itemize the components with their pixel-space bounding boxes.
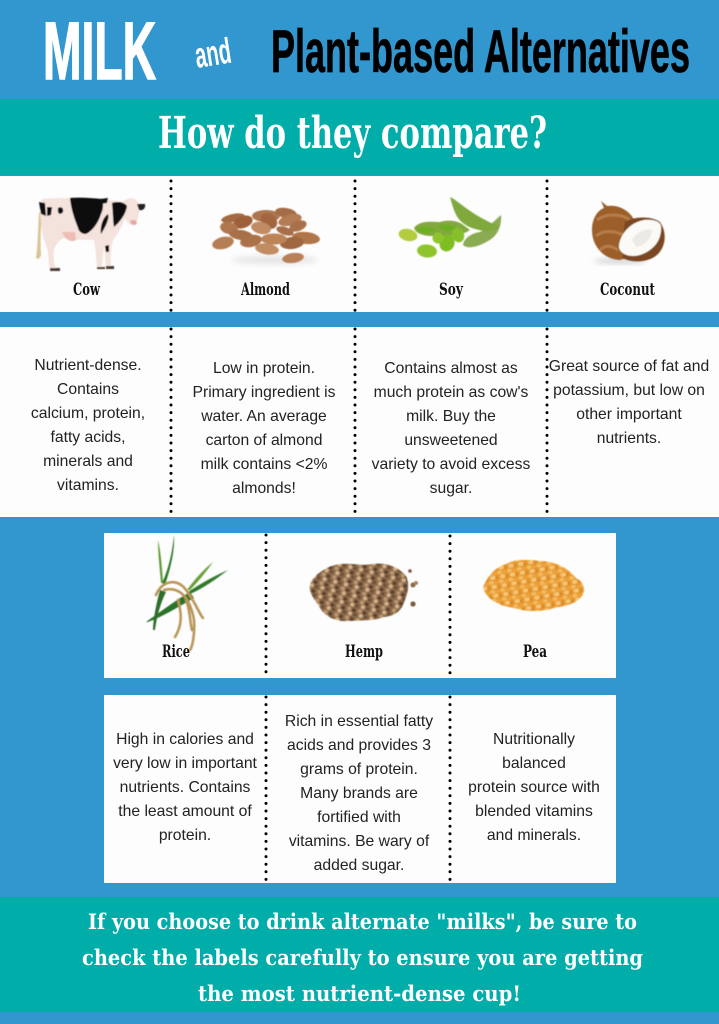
- footer message: If you choose to drink alternate "milks", be sure to: [88, 909, 637, 934]
- text: hemp description: Many brands are: [300, 785, 418, 802]
- text: soy description: much protein as cow's: [374, 384, 529, 401]
- label: Soy: Soy: [439, 280, 464, 300]
- text: cow description: minerals and: [43, 453, 133, 470]
- panel: second row images: [104, 533, 616, 678]
- text: soy description: Contains almost as: [384, 360, 518, 377]
- title: MILK: MILK: [43, 6, 156, 97]
- icon: split peas: [483, 560, 584, 611]
- text: almond description: milk contains <2%: [201, 456, 327, 473]
- text: rice description: protein.: [159, 827, 211, 844]
- text: cow description: Contains: [57, 381, 119, 398]
- text: coconut description: other important: [576, 406, 682, 423]
- footer message: [82, 909, 643, 1006]
- text: almond description: carton of almond: [206, 432, 322, 449]
- icon: hemp seeds: [310, 564, 418, 621]
- text: coconut description: potassium, but low on: [553, 382, 705, 399]
- text: hemp description: fortified with: [317, 809, 401, 826]
- text: cow description: calcium, protein,: [31, 405, 145, 422]
- text: pea description: Nutritionally: [493, 731, 575, 748]
- icon: cow: [36, 198, 145, 271]
- label: Almond: Almond: [240, 280, 290, 300]
- text: cow description: vitamins.: [57, 477, 119, 494]
- text: pea description: blended vitamins: [475, 803, 593, 820]
- text: coconut description: Great source of fat and: [549, 358, 709, 375]
- text: coconut description: nutrients.: [597, 430, 661, 447]
- text: almond description: almonds!: [232, 480, 296, 497]
- text: almond description: Low in protein.: [213, 360, 315, 377]
- text: almond description: water. An average: [200, 408, 327, 425]
- text: pea description: protein source with: [468, 779, 600, 796]
- panel: second row descriptions: [104, 695, 616, 883]
- icon: soy beans: [397, 197, 501, 259]
- footer band: [0, 897, 719, 1012]
- label: Coconut: Coconut: [600, 280, 655, 300]
- panel: first row descriptions: [0, 327, 719, 517]
- text: rice description: very low in important: [113, 755, 258, 772]
- footer message: the most nutrient-dense cup!: [198, 981, 521, 1006]
- icon: rice plant: [146, 535, 228, 650]
- text: hemp description: vitamins. Be wary of: [289, 833, 430, 850]
- panel: first row images: [0, 176, 719, 312]
- label: Rice: Rice: [162, 642, 190, 662]
- text: rice description: High in calories and: [116, 731, 254, 748]
- text: hemp description: added sugar.: [314, 857, 404, 874]
- text: soy description: milk. Buy the: [406, 408, 496, 425]
- text: soy description: variety to avoid excess: [372, 456, 530, 473]
- text: hemp description: Rich in essential fatty: [285, 713, 433, 730]
- text: almond description: Primary ingredient is: [193, 384, 336, 401]
- text: soy description: unsweetened: [404, 432, 498, 449]
- icon: almonds: [211, 206, 321, 264]
- footer message: check the labels carefully to ensure you are getting: [82, 945, 643, 970]
- text: pea description: balanced: [502, 755, 566, 772]
- text: rice description: nutrients. Contains: [120, 779, 251, 796]
- icon: coconut: [592, 201, 665, 264]
- text: soy description: sugar.: [430, 480, 472, 497]
- text: cow description: fatty acids,: [51, 429, 125, 446]
- label: Hemp: Hemp: [345, 642, 383, 662]
- label: Cow: Cow: [73, 280, 100, 300]
- subtitle: How do they compare?: How do they compare?: [158, 108, 547, 159]
- text: hemp description: grams of protein.: [300, 761, 418, 778]
- text: cow description: Nutrient-dense.: [34, 357, 142, 374]
- label: Pea: Pea: [523, 642, 547, 662]
- title: and: and: [192, 30, 234, 76]
- subtitle band: [0, 99, 719, 175]
- text: rice description: the least amount of: [118, 803, 252, 820]
- text: pea description: and minerals.: [487, 827, 581, 844]
- text: hemp description: acids and provides 3: [287, 737, 431, 754]
